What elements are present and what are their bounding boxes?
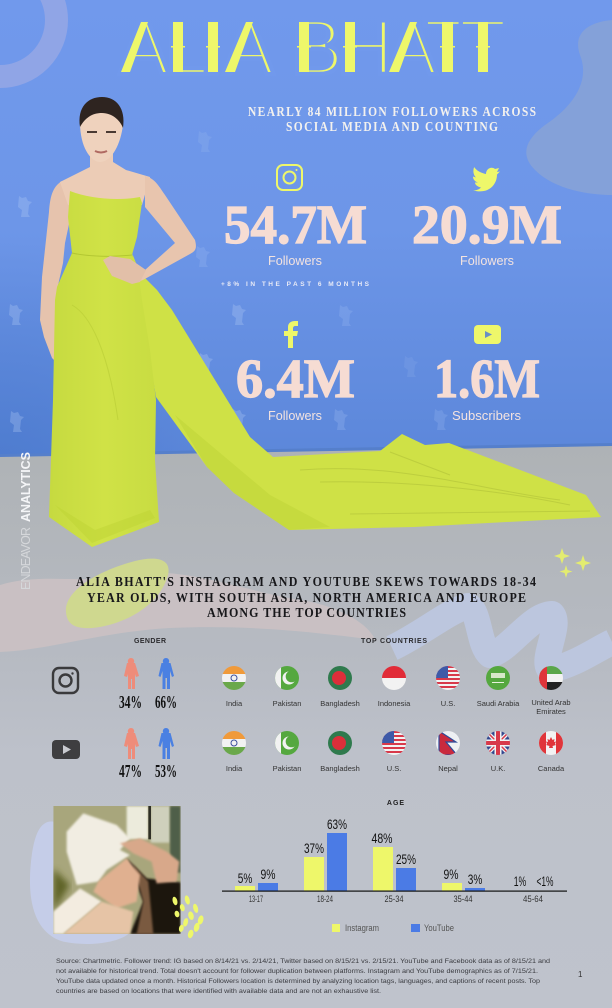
stat: Twitter bbox=[412, 167, 562, 268]
bar value labels: 25% bbox=[396, 852, 416, 867]
subheading: SOCIAL MEDIA AND COUNTING bbox=[286, 119, 498, 134]
bar value labels: 63% bbox=[327, 817, 347, 832]
title: A bbox=[223, 4, 274, 91]
bar value labels: 48% bbox=[372, 831, 392, 846]
icon: YouTube bbox=[474, 325, 501, 344]
top countries: YouTube row: Bangladesh bbox=[320, 764, 360, 773]
demographics heading: AMONG THE TOP COUNTRIES bbox=[207, 604, 406, 620]
bars: YouTube bbox=[258, 833, 485, 891]
top countries: Instagram row bbox=[222, 666, 571, 716]
bar value labels: <1% bbox=[536, 874, 554, 889]
icon: female bbox=[124, 728, 139, 759]
top countries: YouTube row: Canada bbox=[538, 764, 565, 773]
stat: YouTube: 1.6M bbox=[434, 348, 540, 409]
vertical brand label: ENDEAVOR bbox=[19, 527, 33, 590]
title: H bbox=[337, 3, 393, 91]
bar value labels: 5% bbox=[238, 871, 252, 886]
age axis labels: 25-34 bbox=[384, 894, 404, 904]
gender: Instagram row: 34% bbox=[119, 692, 142, 712]
top countries heading: TOP COUNTRIES bbox=[361, 638, 427, 645]
decorative blob top right bbox=[526, 20, 612, 195]
neck and chest bbox=[60, 150, 150, 205]
title: I bbox=[202, 3, 224, 91]
top countries: Instagram row: Pakistan bbox=[273, 699, 301, 708]
bar value labels: 37% bbox=[304, 841, 324, 856]
title: A bbox=[387, 5, 437, 91]
left arm bbox=[40, 181, 72, 364]
source footnote bbox=[56, 958, 550, 995]
stat: Instagram: 54.7M bbox=[224, 194, 367, 255]
top countries: Instagram row: India bbox=[226, 699, 243, 708]
top countries: YouTube row: Pakistan bbox=[273, 764, 301, 773]
face bbox=[80, 111, 123, 162]
icon: male bbox=[158, 728, 174, 759]
gown bbox=[49, 191, 159, 547]
gender: Instagram row bbox=[119, 658, 177, 712]
age chart bbox=[222, 800, 567, 933]
bar value labels: 1% bbox=[514, 874, 526, 889]
top countries: YouTube row: India bbox=[226, 764, 243, 773]
demographics heading: ALIA BHATT'S INSTAGRAM AND YOUTUBE SKEWS TOWARDS 18-34 bbox=[76, 573, 536, 589]
stat: Instagram: Followers bbox=[268, 254, 322, 268]
decorative lime blob bbox=[66, 559, 169, 628]
source footnote: countries are based on locations that were identified with available data and are not an exhaustive list. bbox=[56, 988, 381, 995]
vertical brand label bbox=[19, 452, 33, 590]
right arm bbox=[103, 176, 196, 284]
source footnote: not available for historical trend. Total doesn't account for follower duplication between platforms. Instagram and YouTube demographics as of 7/15/21. bbox=[56, 968, 538, 975]
photo: woman in lime gown with long train bbox=[40, 97, 601, 547]
bar value labels: 3% bbox=[468, 872, 482, 887]
source footnote: Source: Chartmetric. Follower trend: IG based on 8/14/21 vs. 2/14/21, Twitter based on 8/15/21 vs. 2/15/21. YouTube and Facebook data as of 8/15/21 and bbox=[56, 958, 550, 965]
top countries: Instagram row: United Arab bbox=[531, 698, 571, 707]
stat: YouTube bbox=[434, 325, 540, 423]
bars: Instagram bbox=[235, 847, 462, 891]
legend bbox=[332, 923, 454, 933]
demographics heading: YEAR OLDS, WITH SOUTH ASIA, NORTH AMERICA AND EUROPE bbox=[87, 589, 526, 605]
age axis labels: 35-44 bbox=[454, 894, 472, 904]
stat: Facebook bbox=[236, 321, 355, 423]
age axis labels: 45-64 bbox=[523, 894, 543, 904]
icon: Twitter bbox=[473, 167, 500, 191]
top countries: Instagram row: U.S. bbox=[441, 699, 455, 708]
hand on waist bbox=[103, 256, 146, 284]
title: T bbox=[424, 3, 472, 91]
decorative ring top left bbox=[0, 0, 56, 76]
top countries: Instagram row: Indonesia bbox=[378, 699, 411, 708]
decorative lavender squiggle bbox=[392, 606, 612, 670]
icon: Facebook bbox=[284, 321, 298, 348]
age axis labels bbox=[249, 894, 543, 904]
vertical brand label: ANALYTICS bbox=[19, 452, 33, 522]
legend: YouTube bbox=[424, 923, 454, 933]
photo: portrait bbox=[53, 806, 181, 934]
title: A bbox=[119, 5, 169, 91]
gender: YouTube row: 47% bbox=[119, 761, 142, 781]
title bbox=[119, 3, 507, 91]
icon: Instagram dark bbox=[53, 668, 78, 693]
decorative lavender blob behind photo bbox=[30, 822, 128, 944]
subheading bbox=[248, 104, 536, 134]
top countries: YouTube row: Nepal bbox=[438, 764, 458, 773]
icon: male bbox=[158, 658, 174, 689]
title: L bbox=[165, 3, 208, 91]
age axis labels: 18-24 bbox=[317, 894, 333, 904]
stat: Facebook: 6.4M bbox=[236, 348, 355, 409]
stat: Twitter: Followers bbox=[460, 254, 514, 268]
stat: Instagram: +8% IN THE PAST 6 MONTHS bbox=[221, 281, 370, 288]
icon: female bbox=[124, 658, 139, 689]
title: B bbox=[291, 3, 343, 91]
bar value labels: 9% bbox=[260, 867, 276, 882]
top countries: YouTube row: U.K. bbox=[491, 764, 505, 773]
title: T bbox=[459, 3, 507, 91]
top countries: Instagram row: Bangladesh bbox=[320, 699, 360, 708]
train bbox=[132, 253, 601, 530]
gender: Instagram row: 66% bbox=[155, 692, 177, 712]
decorative stars bbox=[554, 548, 591, 578]
top countries: YouTube row: U.S. bbox=[387, 764, 401, 773]
bar value labels: 9% bbox=[444, 867, 458, 882]
hair bbox=[80, 97, 124, 128]
stat: YouTube: Subscribers bbox=[452, 409, 521, 423]
gender: YouTube row: 53% bbox=[155, 761, 177, 781]
legend: Instagram bbox=[345, 923, 379, 933]
stat: Twitter: 20.9M bbox=[412, 194, 562, 255]
top countries: Instagram row: Saudi Arabia bbox=[477, 699, 520, 708]
bar value labels bbox=[238, 817, 554, 889]
top countries: YouTube row bbox=[222, 731, 565, 773]
gender: YouTube row bbox=[119, 728, 177, 781]
icon: Instagram bbox=[277, 165, 302, 190]
stat: Facebook: Followers bbox=[268, 409, 322, 423]
demographics heading bbox=[76, 573, 536, 620]
decorative pink wave bbox=[0, 573, 375, 652]
subheading: NEARLY 84 MILLION FOLLOWERS ACROSS bbox=[248, 104, 536, 119]
stat: Instagram bbox=[221, 165, 370, 288]
decorative yellow dots bbox=[172, 895, 204, 939]
age axis labels: 13-17 bbox=[249, 894, 263, 904]
top countries: Instagram row: Emirates bbox=[536, 707, 566, 716]
page number: 1 bbox=[578, 970, 583, 979]
source footnote: YouTube data updated once a month. Historical Followers location is determined by analyzing location tags, languages, and captions of recent posts. Top bbox=[56, 978, 540, 985]
gender heading: GENDER bbox=[134, 638, 166, 645]
icon: YouTube dark bbox=[52, 740, 80, 759]
age chart: AGE bbox=[387, 800, 405, 807]
